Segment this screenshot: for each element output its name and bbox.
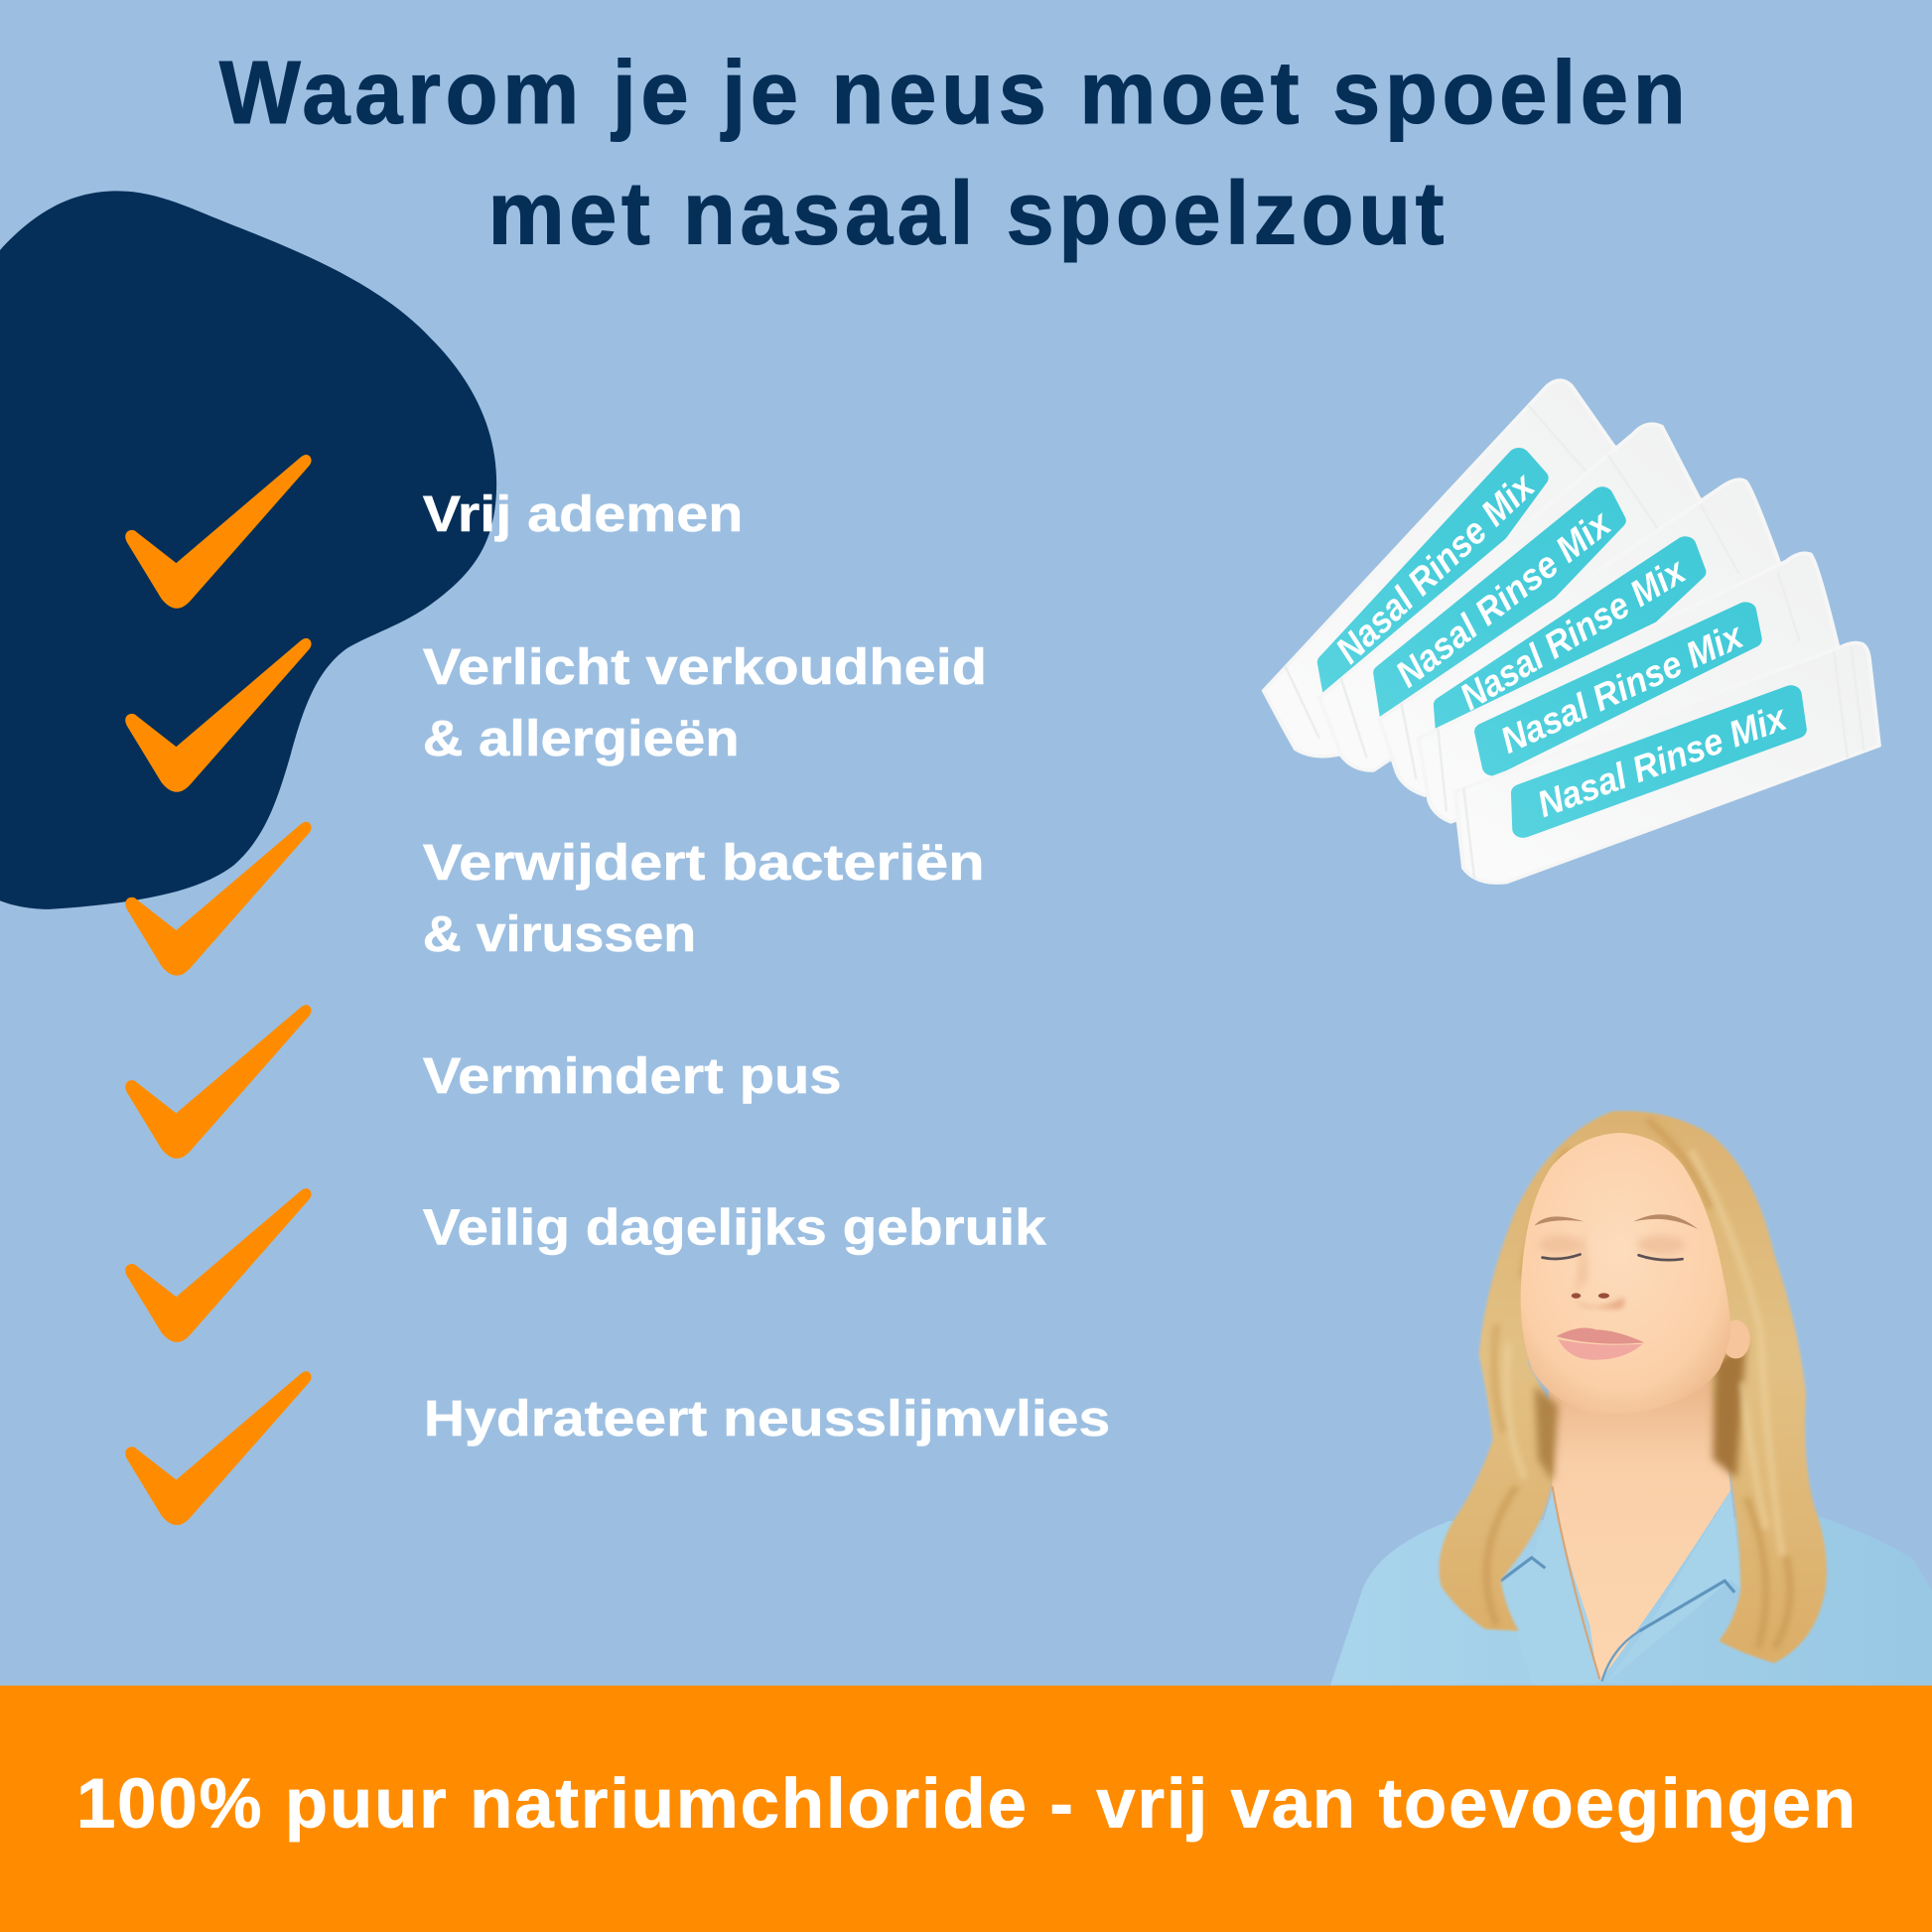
title: Waarom je je neus moet spoelen	[219, 43, 1686, 142]
hair shadow	[1713, 1339, 1746, 1478]
footer text: 100% puur natriumchloride - vrij van toevoegingen	[76, 1764, 1856, 1843]
footer banner	[0, 1686, 1932, 1932]
sachet 2: Nasal Rinse Mix	[1388, 501, 1619, 695]
icon: check 3	[125, 822, 312, 976]
benefit: vrij ademen: Vrij ademen	[423, 485, 743, 542]
sachet 4	[1419, 553, 1843, 822]
icon: check 2	[125, 638, 312, 792]
eyes	[1543, 1254, 1683, 1260]
sachet 3	[1380, 480, 1791, 795]
title: met nasaal spoelzout	[487, 163, 1445, 263]
benefit: veilig dagelijks gebruik: Veilig dagelijks gebruik	[423, 1198, 1046, 1255]
icon: check 4	[125, 1005, 312, 1159]
icon: check 6	[125, 1371, 312, 1525]
eye shading	[1539, 1227, 1685, 1297]
benefit: hydrateert neusslijmvlies: Hydrateert neusslijmvlies	[424, 1390, 1110, 1447]
sachet 3: Nasal Rinse Mix	[1452, 549, 1693, 718]
photo: woman breathing freely	[1330, 1111, 1932, 1685]
hair strands	[1486, 1119, 1790, 1648]
sachet 1: Nasal Rinse Mix	[1327, 464, 1543, 671]
benefit: verkoudheid en allergieën	[423, 638, 987, 766]
sachet 4: Nasal Rinse Mix	[1494, 614, 1750, 761]
benefit: verkoudheid en allergieën: & allergieën	[423, 710, 740, 766]
shirt	[1330, 1517, 1932, 1685]
lips	[1557, 1328, 1644, 1360]
nose	[1572, 1293, 1624, 1310]
neck and chest	[1549, 1370, 1730, 1681]
ear	[1722, 1320, 1750, 1359]
benefit: verkoudheid en allergieën: Verlicht verkoudheid	[423, 638, 987, 695]
benefit: bacteriën en virussen: Verwijdert bacteriën	[423, 834, 985, 891]
benefit: vermindert pus: Vermindert pus	[423, 1047, 842, 1104]
sachet 5: Nasal Rinse Mix	[1532, 696, 1792, 825]
sachet 2	[1319, 424, 1726, 770]
collar	[1500, 1486, 1742, 1685]
decorative navy blob	[0, 191, 496, 909]
eyebrows	[1535, 1214, 1698, 1229]
face	[1521, 1133, 1730, 1414]
sachet 5	[1455, 643, 1879, 883]
benefit: bacteriën en virussen	[423, 834, 985, 962]
sachet 1	[1264, 380, 1662, 757]
icon: check 5	[125, 1188, 312, 1342]
product: sachets	[1264, 380, 1879, 883]
icon: check 1	[125, 455, 312, 609]
checklist	[125, 455, 1110, 1525]
benefit: bacteriën en virussen: & virussen	[423, 905, 696, 962]
hair	[1439, 1111, 1827, 1663]
title	[219, 43, 1686, 263]
